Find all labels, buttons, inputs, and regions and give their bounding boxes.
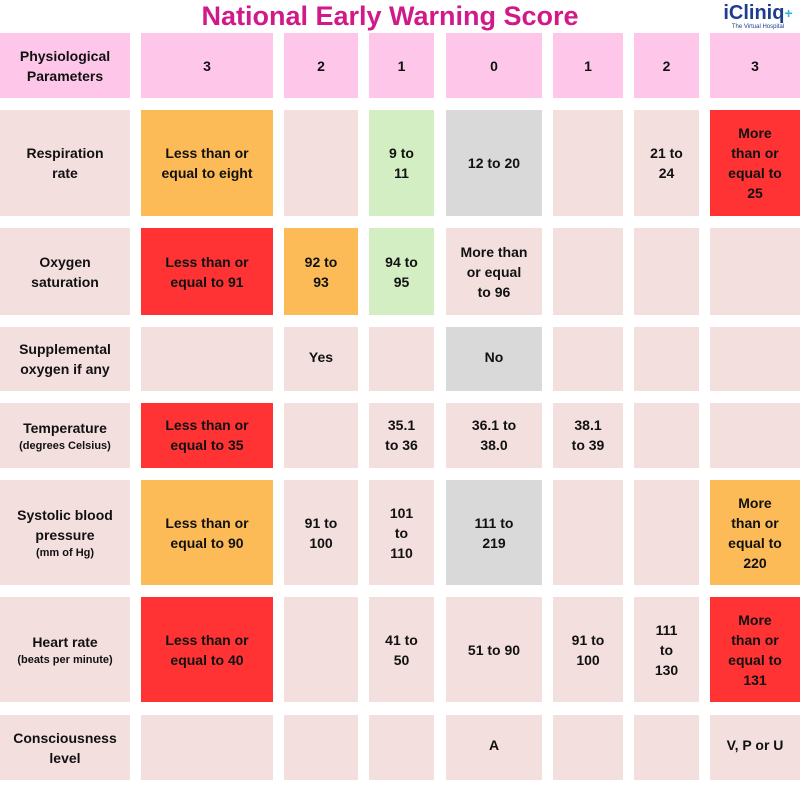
text: equal to 90 [170,534,244,550]
text: 91 to [305,514,337,530]
text: 91 to [572,632,604,648]
text: to 39 [572,437,604,453]
text: 2 [317,58,325,74]
text: (degrees Celsius) [19,440,111,452]
text: 111 [656,622,677,638]
row: heart rate [0,597,800,702]
row: consciousness level [0,715,800,780]
text: 94 to [385,254,418,270]
text: 2 [663,58,670,74]
text: Parameters [27,68,103,84]
text: (mm of Hg) [36,546,94,558]
text: equal to eight [162,165,252,181]
text: A [489,737,499,753]
text: to 96 [478,284,510,300]
text: 25 [747,185,763,201]
text: Less than or [165,417,249,433]
text: equal to [728,165,782,181]
text: than or [731,145,779,161]
text: No [485,349,503,365]
text: 41 to [385,632,418,648]
text: 38.1 [574,417,602,433]
row: respiration rate [0,110,800,216]
text: 100 [576,652,600,668]
text: equal to [728,652,782,668]
text: More [738,494,772,510]
row: oxygen saturation [0,228,800,315]
text: than or [731,632,779,648]
text: pressure [35,526,95,542]
text: 12 to 20 [468,155,520,171]
text: equal to 91 [170,274,244,290]
text: to [660,642,673,658]
text: More [738,125,772,141]
text: 36.1 to [472,417,516,433]
text: Heart rate [32,634,98,650]
text: 38.0 [480,437,508,453]
header row [0,33,800,98]
text: 93 [313,274,329,290]
text: or equal [467,264,521,280]
text: 1 [584,58,592,74]
text: oxygen if any [20,361,110,377]
text: Systolic blood [17,506,113,522]
text: 92 to [305,254,337,270]
text: Less than or [165,145,249,161]
text: rate [52,165,78,181]
text: 100 [309,534,333,550]
logo: The Virtual Hospital [732,24,784,30]
text: than or [731,514,779,530]
title: National Early Warning Score [201,1,579,31]
text: 0 [490,58,498,74]
text: 219 [482,534,506,550]
text: Respiration [26,145,104,161]
text: 1 [398,58,405,74]
text: level [49,750,81,766]
text: Yes [309,349,333,365]
text: 110 [390,544,413,560]
text: 95 [394,274,409,290]
row: temperature [0,403,800,468]
text: Less than or [165,514,249,530]
text: 9 to [389,145,414,161]
text: Supplemental [19,341,111,357]
text: 130 [655,662,678,678]
text: V, P or U [727,737,783,753]
text: 220 [743,554,767,570]
text: 50 [394,652,409,668]
text: 101 [390,504,413,520]
text: (beats per minute) [17,654,113,666]
text: 3 [751,58,759,74]
logo: iCliniq+ [723,2,793,24]
text: Consciousness [13,730,117,746]
text: equal to 40 [170,652,244,668]
row: systolic blood pressure [0,480,800,585]
text: More [738,612,772,628]
text: Oxygen [39,254,91,270]
text: equal to [728,534,782,550]
text: Less than or [165,632,249,648]
text: 131 [743,672,767,688]
text: Temperature [23,420,107,436]
text: to 36 [385,437,418,453]
text: Physiological [20,48,110,64]
text: More than [461,244,527,260]
text: 35.1 [388,417,415,433]
text: saturation [31,274,99,290]
text: Less than or [165,254,249,270]
text: 111 to [475,514,513,530]
row: supplemental oxygen [0,327,800,391]
text: 11 [394,165,409,181]
text: 51 to 90 [468,642,520,658]
text: 21 to [650,145,683,161]
text: 24 [659,165,674,181]
text: equal to 35 [170,437,244,453]
text: to [395,524,408,540]
text: 3 [203,58,211,74]
